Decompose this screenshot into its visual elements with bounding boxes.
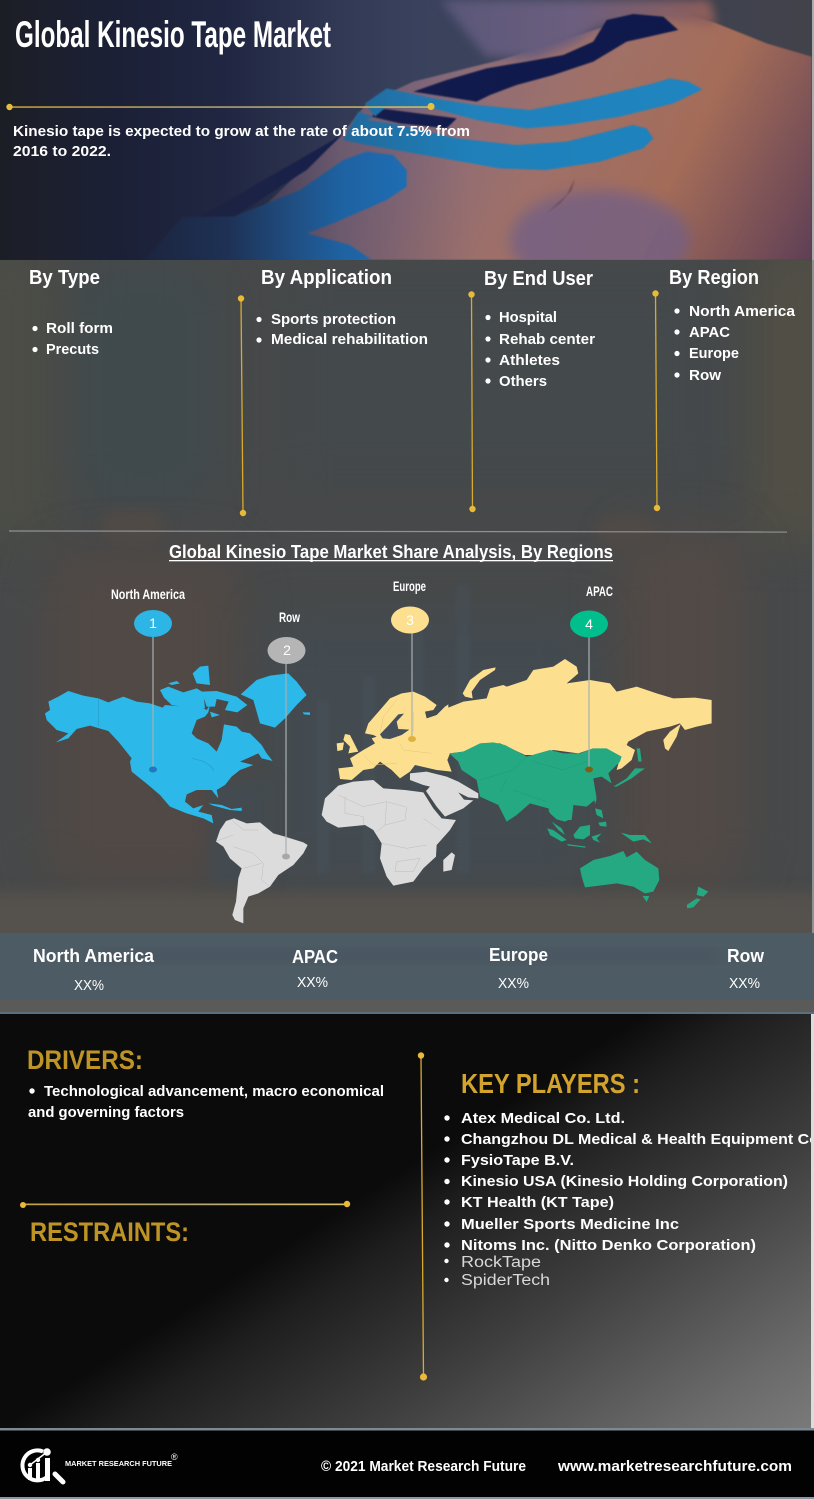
list: key players: Nitoms Inc. (Nitto Denko Corporation) <box>461 1237 756 1254</box>
column: by end user: Others <box>499 373 547 390</box>
list: key players: Mueller Sports Medicine Inc <box>461 1216 679 1233</box>
column: by region: Row <box>689 367 721 384</box>
connector: end user divider <box>652 290 660 511</box>
connector: central vertical divider <box>418 1052 427 1381</box>
heading: restraints: RESTRAINTS: <box>30 1217 189 1247</box>
pin: europe: Europe <box>393 578 426 594</box>
panel: regional share band <box>0 933 814 1014</box>
column: by region: Europe <box>689 345 739 362</box>
column: by type: By Type <box>29 267 100 289</box>
pin: north america: 1 <box>149 615 157 631</box>
photo: shadow on lower back <box>506 185 694 260</box>
column: by region: North America <box>689 303 796 320</box>
photo: neck <box>440 0 717 58</box>
text block: growth summary <box>14 125 469 156</box>
stat: row: Row <box>727 946 765 966</box>
list: key players: FysioTape B.V. <box>461 1152 574 1169</box>
column: by end user: Hospital <box>499 309 557 326</box>
stat: europe <box>489 945 548 992</box>
column: by end user: By End User <box>484 268 593 290</box>
connector: type divider <box>238 295 246 516</box>
list: key players: Kinesio USA (Kinesio Holding Corporation) <box>461 1173 788 1190</box>
heading: key players: KEY PLAYERS : <box>461 1068 640 1099</box>
text: website: www.marketresearchfuture.com <box>557 1458 792 1475</box>
region: europe and russia <box>337 659 712 780</box>
panel: hero photo header <box>0 0 814 260</box>
stat: row: XX% <box>729 975 760 992</box>
region: north america <box>45 666 310 823</box>
stat: apac: XX% <box>297 974 328 991</box>
column: by type: Precuts <box>46 341 99 358</box>
title: Global Kinesio Tape Market <box>15 14 331 55</box>
logo: market research future: ® <box>171 1452 178 1462</box>
stat: apac <box>292 947 338 991</box>
pin: north america <box>111 586 185 772</box>
panel: market segments <box>29 267 796 516</box>
text block: drivers list: and governing factors <box>28 1104 184 1121</box>
column: by end user: Rehab center <box>499 331 595 348</box>
region: africa and middle east <box>322 772 478 886</box>
photo: lower blue tape <box>343 112 653 170</box>
column: by application: By Application <box>261 267 392 289</box>
stat: apac: APAC <box>292 947 338 967</box>
stat: north america: XX% <box>74 977 104 994</box>
text block: growth summary: Kinesio tape is expected to grow at the rate of about 7.5% from <box>13 123 470 140</box>
divider: hero gold line <box>6 103 435 110</box>
text block: growth summary: 2016 to 2022. <box>13 143 111 160</box>
list: key players: SpiderTech <box>461 1272 550 1289</box>
logo: market research future: MARKET RESEARCH FUTURE <box>65 1459 172 1468</box>
panel: segments and map background <box>0 260 814 933</box>
heading: drivers: DRIVERS: <box>27 1045 143 1075</box>
pin: rest of world: 2 <box>283 642 291 658</box>
stat: europe: XX% <box>498 975 529 992</box>
world map <box>45 659 712 923</box>
photo: shoulder skin <box>268 14 812 260</box>
stat: north america <box>33 946 155 994</box>
column: by type <box>29 267 113 358</box>
stat: europe: Europe <box>489 945 548 965</box>
column: by application <box>256 267 428 348</box>
connector: application divider <box>468 291 476 512</box>
column: by region: By Region <box>669 267 759 289</box>
logo: market research future <box>22 1448 178 1482</box>
column: by end user <box>484 268 595 390</box>
pin: rest of world <box>268 609 306 860</box>
panel: footer <box>0 1431 814 1499</box>
region: asia pacific <box>449 742 708 908</box>
list: key players: KT Health (KT Tape) <box>461 1194 614 1211</box>
list: key players: Changzhou DL Medical & Health Equipment Co <box>461 1131 814 1148</box>
pin: rest of world: Row <box>279 609 300 625</box>
divider: drivers and restraints <box>20 1201 350 1208</box>
pin: apac: 4 <box>585 616 593 632</box>
list: key players: Atex Medical Co. Ltd. <box>461 1110 625 1127</box>
column: by region <box>669 267 796 384</box>
heading: market share analysis: Global Kinesio Tape Market Share Analysis, By Regions <box>169 542 613 562</box>
photo: upper blue tape <box>365 78 703 128</box>
pin: europe: 3 <box>406 612 414 628</box>
text block: drivers list <box>28 1083 384 1121</box>
panel: drivers restraints and key players <box>0 1014 814 1430</box>
column: by end user: Athletes <box>499 352 560 369</box>
text: copyright: © 2021 Market Research Future <box>321 1458 526 1475</box>
photo: shoulder crease <box>550 180 574 211</box>
photo: large blue patch <box>145 152 407 260</box>
column: by type: Roll form <box>46 320 113 337</box>
text block: drivers list: Technological advancement, macro economical <box>44 1083 384 1100</box>
column: by application: Sports protection <box>271 311 396 328</box>
pin: apac <box>570 583 613 772</box>
pin: north america: North America <box>111 586 185 602</box>
pin: apac: APAC <box>586 583 613 599</box>
column: by region: APAC <box>689 324 730 341</box>
stat: row <box>727 946 765 992</box>
column: by application: Medical rehabilitation <box>271 331 428 348</box>
stat: north america: North America <box>33 946 155 966</box>
list: key players <box>444 1110 814 1289</box>
region: south america <box>216 818 308 923</box>
photo: dark navy tape <box>244 13 679 208</box>
pin: europe <box>391 578 429 742</box>
list: key players: RockTape <box>461 1254 541 1271</box>
